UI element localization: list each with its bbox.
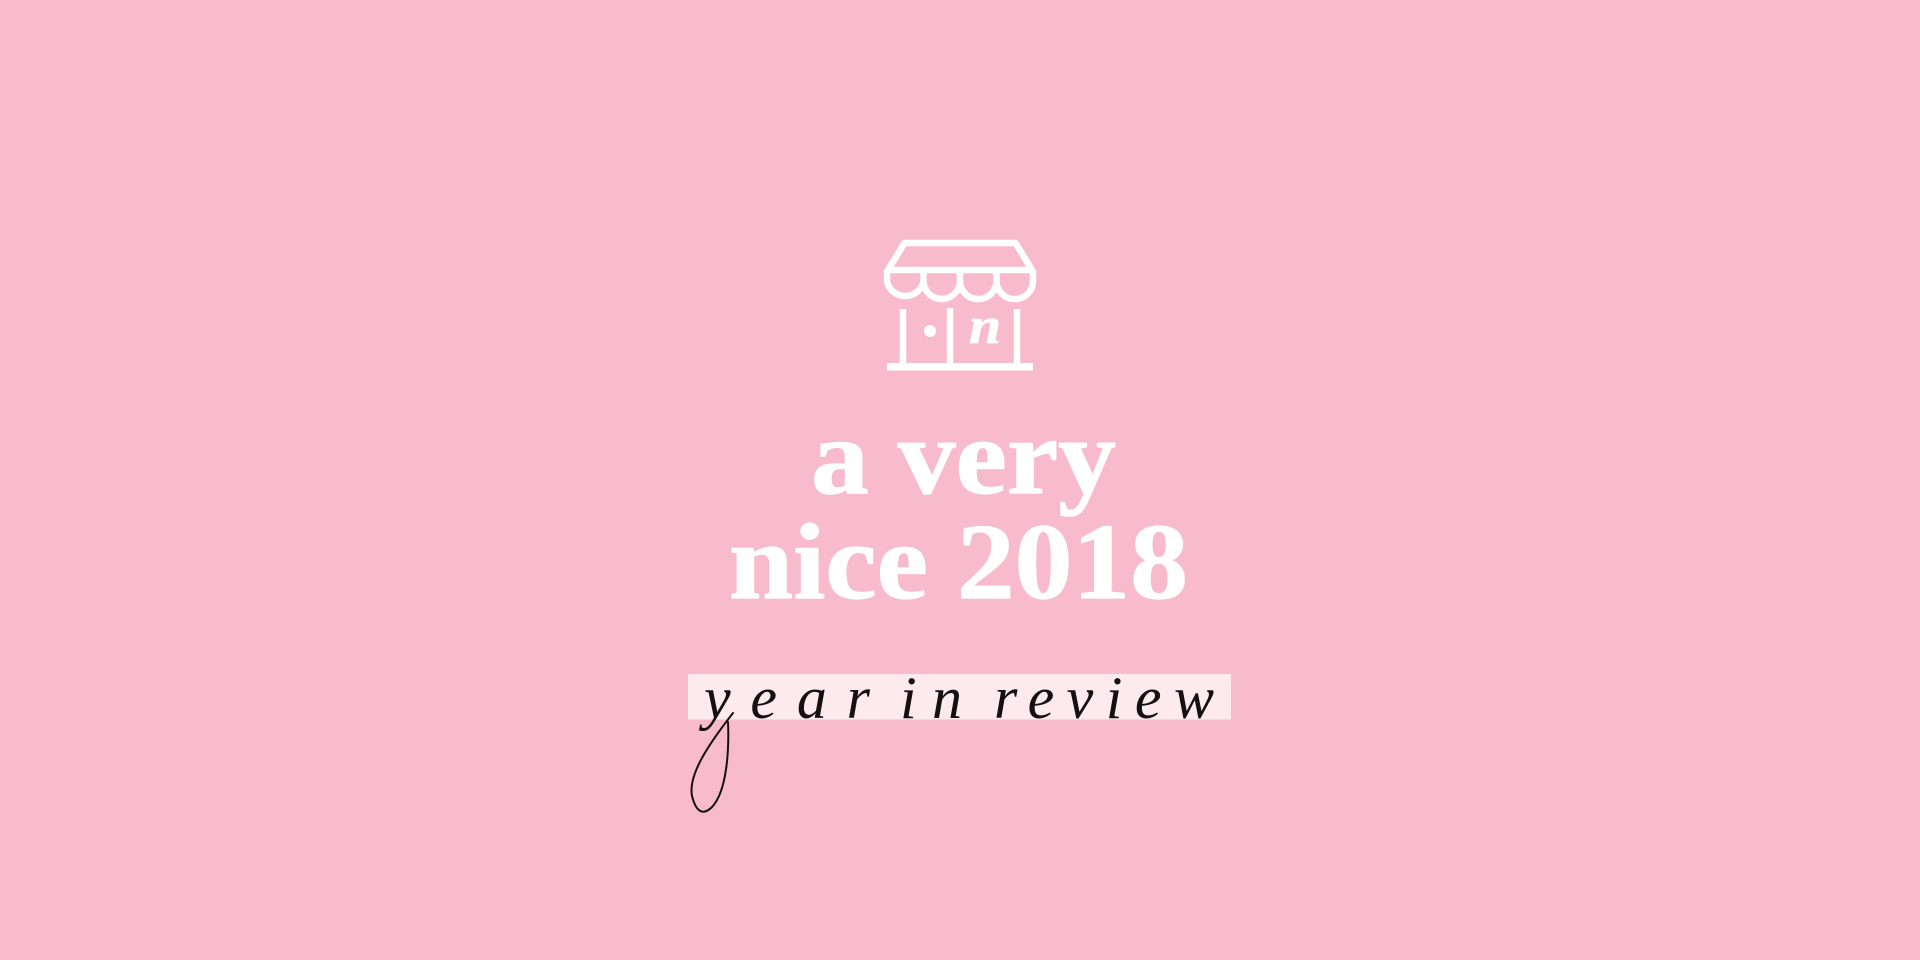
icon: awning scallops <box>887 270 1033 299</box>
icon: awning roof <box>888 243 1032 270</box>
subtitle highlight band <box>688 674 1231 720</box>
icon: shop floor <box>887 363 1033 370</box>
icon: door knob <box>924 325 936 337</box>
subtitle text: in <box>900 665 962 731</box>
icon: shop posts <box>903 308 1017 365</box>
icon: storefront <box>887 243 1033 370</box>
title line 1: a very <box>811 398 1116 517</box>
subtitle <box>691 665 1214 812</box>
icon: window letter n: n <box>969 298 1001 355</box>
title line 2: nice 2018 <box>729 503 1188 622</box>
subtitle text: year <box>698 665 871 731</box>
title <box>729 398 1188 622</box>
subtitle descender flourish <box>691 713 733 812</box>
subtitle text: review <box>994 665 1214 731</box>
